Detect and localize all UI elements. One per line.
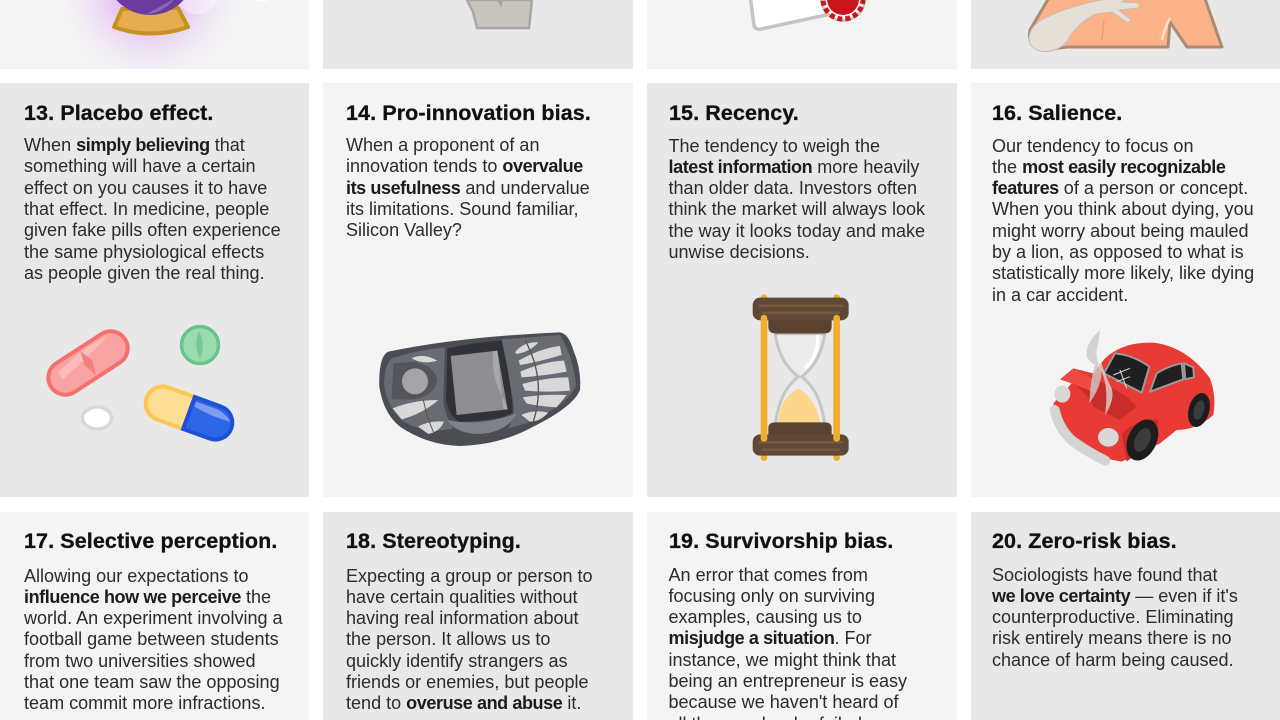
text: 13 body: effect on you causes it to have [24,178,267,198]
icon: sunburned person [1028,0,1224,52]
text: 16 body: might worry about being mauled [992,221,1249,241]
text: 16 body: by a lion, as opposed to what is [992,242,1244,262]
text: 17 body: from two universities showed [24,651,256,671]
text: 15 body [668,136,925,262]
icon: crashed red car [1050,330,1214,466]
text: 19 body: misjudge a situation. For [668,628,872,648]
text: 18 body: tend to overuse and abuse it. [346,693,581,713]
panel: 19 Survivorship bias [647,512,957,720]
text: 14 body: its usefulness and undervalue [346,178,590,198]
text: 13 body: the same physiological effects [24,242,264,262]
panel: crystal ball card (cut off) [0,0,309,69]
text: 16 body: statistically more likely, like dying [992,263,1254,283]
text: 13 body: When simply believing that [24,135,245,155]
text: 15 body: the way it looks today and make [668,221,925,241]
text: 20 body: counterproductive. Eliminating [992,607,1234,627]
panel: 13 Placebo effect [0,83,309,497]
text: 16 body: the most easily recognizable [992,157,1225,177]
text: 13 body: given fake pills often experience [24,220,281,240]
panel: stone hand card (cut off) [323,0,633,69]
text: 13 body [24,135,281,283]
icon: game phone [379,332,580,446]
text: 14 body: Silicon Valley? [346,220,462,240]
text: 19 body: examples, causing us to [668,607,862,627]
text: 17 body: football game between students [24,629,279,649]
heading: 13: 13. Placebo effect. [24,101,214,125]
heading: 20: 20. Zero-risk bias. [992,529,1177,553]
text: 20 body: risk entirely means there is no [992,628,1232,648]
panel: 17 Selective perception [0,512,309,720]
text: 17 body: influence how we perceive the [24,587,271,607]
heading: 15: 15. Recency. [669,101,799,125]
text: 16 body: in a car accident. [992,285,1128,305]
panel: 18 Stereotyping [323,512,633,720]
text: 17 body: Allowing our expectations to [24,566,249,586]
text: 20 body: we love certainty — even if it's [992,586,1238,606]
icon: stone hand [466,0,534,30]
text: 18 body: Expecting a group or person to [346,566,593,586]
text: 15 body: than older data. Investors often [668,178,917,198]
text: 16 body: When you think about dying, you [992,199,1254,219]
text: 18 body: friends or enemies, but people [346,672,589,692]
text: 20 body: chance of harm being caused. [992,650,1234,670]
heading: 19: 19. Survivorship bias. [669,529,893,553]
icon: crystal ball [78,0,222,64]
heading: 14: 14. Pro-innovation bias. [346,101,591,125]
text: 18 body: quickly identify strangers as [346,651,567,671]
text: 18 body: the person. It allows us to [346,629,550,649]
text: 15 body: The tendency to weigh the [668,136,880,156]
text: 13 body: as people given the real thing. [24,263,265,283]
heading: 18: 18. Stereotyping. [346,529,521,553]
text: 13 body: something will have a certain [24,156,256,176]
text: 17 body: world. An experiment involving a [24,608,283,628]
text: 19 body: An error that comes from [668,564,868,584]
heading: 17: 17. Selective perception. [24,529,277,553]
text: 15 body: unwise decisions. [668,242,810,262]
text: 14 body: When a proponent of an [346,135,539,155]
text: 15 body: latest information more heavily [668,157,919,177]
text: 15 body: think the market will always look [668,199,925,219]
panel: 15 Recency [647,83,957,497]
text: 19 body [668,564,907,720]
text: 18 body [346,566,593,713]
text: 14 body [346,135,590,240]
text: 14 body: its limitations. Sound familiar, [346,199,578,219]
icon: pills [46,324,234,442]
panel: 16 Salience [971,83,1280,497]
text: 16 body [992,136,1254,305]
text: 16 body: features of a person or concept. [992,178,1248,198]
text: 20 body: Sociologists have found that [992,564,1218,584]
panel: certificate card (cut off) [647,0,957,69]
icon: hourglass [752,294,849,461]
text: 16 body: Our tendency to focus on [992,136,1193,156]
text: 19 body: instance, we might think that [668,650,896,670]
text: 18 body: having real information about [346,608,579,628]
panel: 14 Pro-innovation bias [323,83,633,497]
text: 13 body: that effect. In medicine, people [24,199,269,219]
text: 17 body: team commit more infractions. [24,693,266,713]
heading: 16: 16. Salience. [992,101,1122,125]
text: 19 body: being an entrepreneur is easy [668,671,907,691]
icon: certificate with seal [749,0,866,31]
panel: 20 Zero-risk bias [971,512,1280,720]
panel: sunburned person card (cut off) [971,0,1280,69]
text: 19 body: because we haven't heard of [668,692,898,712]
text: 18 body: have certain qualities without [346,587,578,607]
text: 14 body: innovation tends to overvalue [346,156,583,176]
text: 17 body: that one team saw the opposing [24,672,280,692]
text: 19 body: focusing only on surviving [668,586,875,606]
text: 17 body [24,566,283,713]
text: 20 body [992,564,1238,670]
